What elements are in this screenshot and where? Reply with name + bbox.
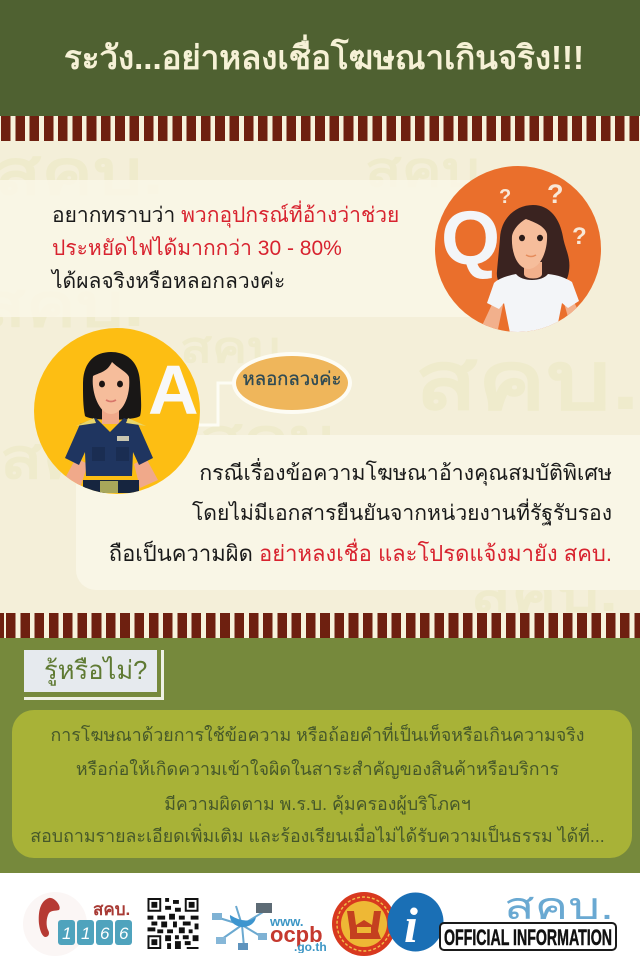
logo: official information: สคบ. [504,887,614,928]
logo: 1166 hotline: 1 [81,924,90,943]
bubble text: หลอกลวงค่ะ [243,368,341,389]
answer bubble [232,352,352,414]
info text: สอบถามรายละเอียดเพิ่มเติม และร้องเรียนเมื่อไม่ได้รับความเป็นธรรม ได้ที่... [30,826,605,846]
logo: 1166 hotline: สคบ. [93,900,130,919]
icon: info circle: i [404,897,418,952]
answer text: โดยไม่มีเอกสารยืนยันจากหน่วยงานที่รัฐรับรอง [192,502,612,525]
logo: ocpb website: www. [269,914,303,929]
icon: question marks: ? [572,223,587,250]
logo: ocpb website: ocpb [270,922,323,947]
icon: QR code [148,898,198,949]
logo: ocpb website [212,903,327,953]
icon: info circle [388,892,444,952]
watermark background: สคบ. [365,144,497,197]
watermark background: สคบ. [0,427,153,490]
icon: question marks: ? [499,186,511,208]
logo: 1166 hotline [23,892,132,956]
bottom stripe band [0,613,640,638]
info text: หรือก่อให้เกิดความเข้าใจผิดในสาระสำคัญของสินค้าหรือบริการ [76,759,559,779]
question text: ประหยัดไฟได้มากกว่า 30 - 80% [52,237,342,260]
answer text: กรณีเรื่องข้อความโฆษณาอ้างคุณสมบัติพิเศษ [199,461,612,485]
logo: 1166 hotline: 6 [100,924,110,943]
info text: การโฆษณาด้วยการใช้ข้อความ หรือถ้อยคำที่เป็นเท็จหรือเกินความจริง [51,725,584,745]
icon: Q circle with woman [435,166,601,332]
watermark background: สคบ. [180,324,295,371]
logo: seal [332,892,392,956]
footer [0,873,640,960]
watermark background: สคบ. [415,336,640,427]
watermark background [0,141,640,613]
icon: A letter: A [148,351,199,429]
top stripe band [0,116,640,141]
logo: 1166 hotline: 6 [119,924,129,943]
question text [50,200,399,293]
logo: 1166 hotline: 1 [62,924,71,943]
title: ระวัง...อย่าหลงเชื่อโฆษณาเกินจริง!!! [64,39,584,76]
answer text [109,458,612,566]
heading badge [24,650,164,700]
info text [30,722,605,846]
did-you-know section [0,638,640,873]
heading badge: รู้หรือไม่? [44,657,147,685]
logo: official information [439,887,617,951]
info text: มีความผิดตาม พ.ร.บ. คุ้มครองผู้บริโภคฯ [164,794,471,814]
header band [0,0,640,116]
icon: question marks: ? [547,179,564,209]
answer panel background [76,435,640,590]
question text: ได้ผลจริงหรือหลอกลวงค่ะ [52,270,285,293]
question text: อยากทราบว่า พวกอุปกรณ์ที่อ้างว่าช่วย [52,204,399,227]
icon: Q letter: Q [441,196,500,281]
icon: question marks [499,179,587,250]
connector line from A circle to bubble [198,382,232,426]
icon: A circle with officer [34,328,200,494]
info panel [12,710,632,858]
watermark background: สคบ. [200,407,353,470]
answer text: ถือเป็นความผิด อย่าหลงเชื่อ และโปรดแจ้งมายัง สคบ. [109,541,612,566]
question panel background [0,180,470,317]
